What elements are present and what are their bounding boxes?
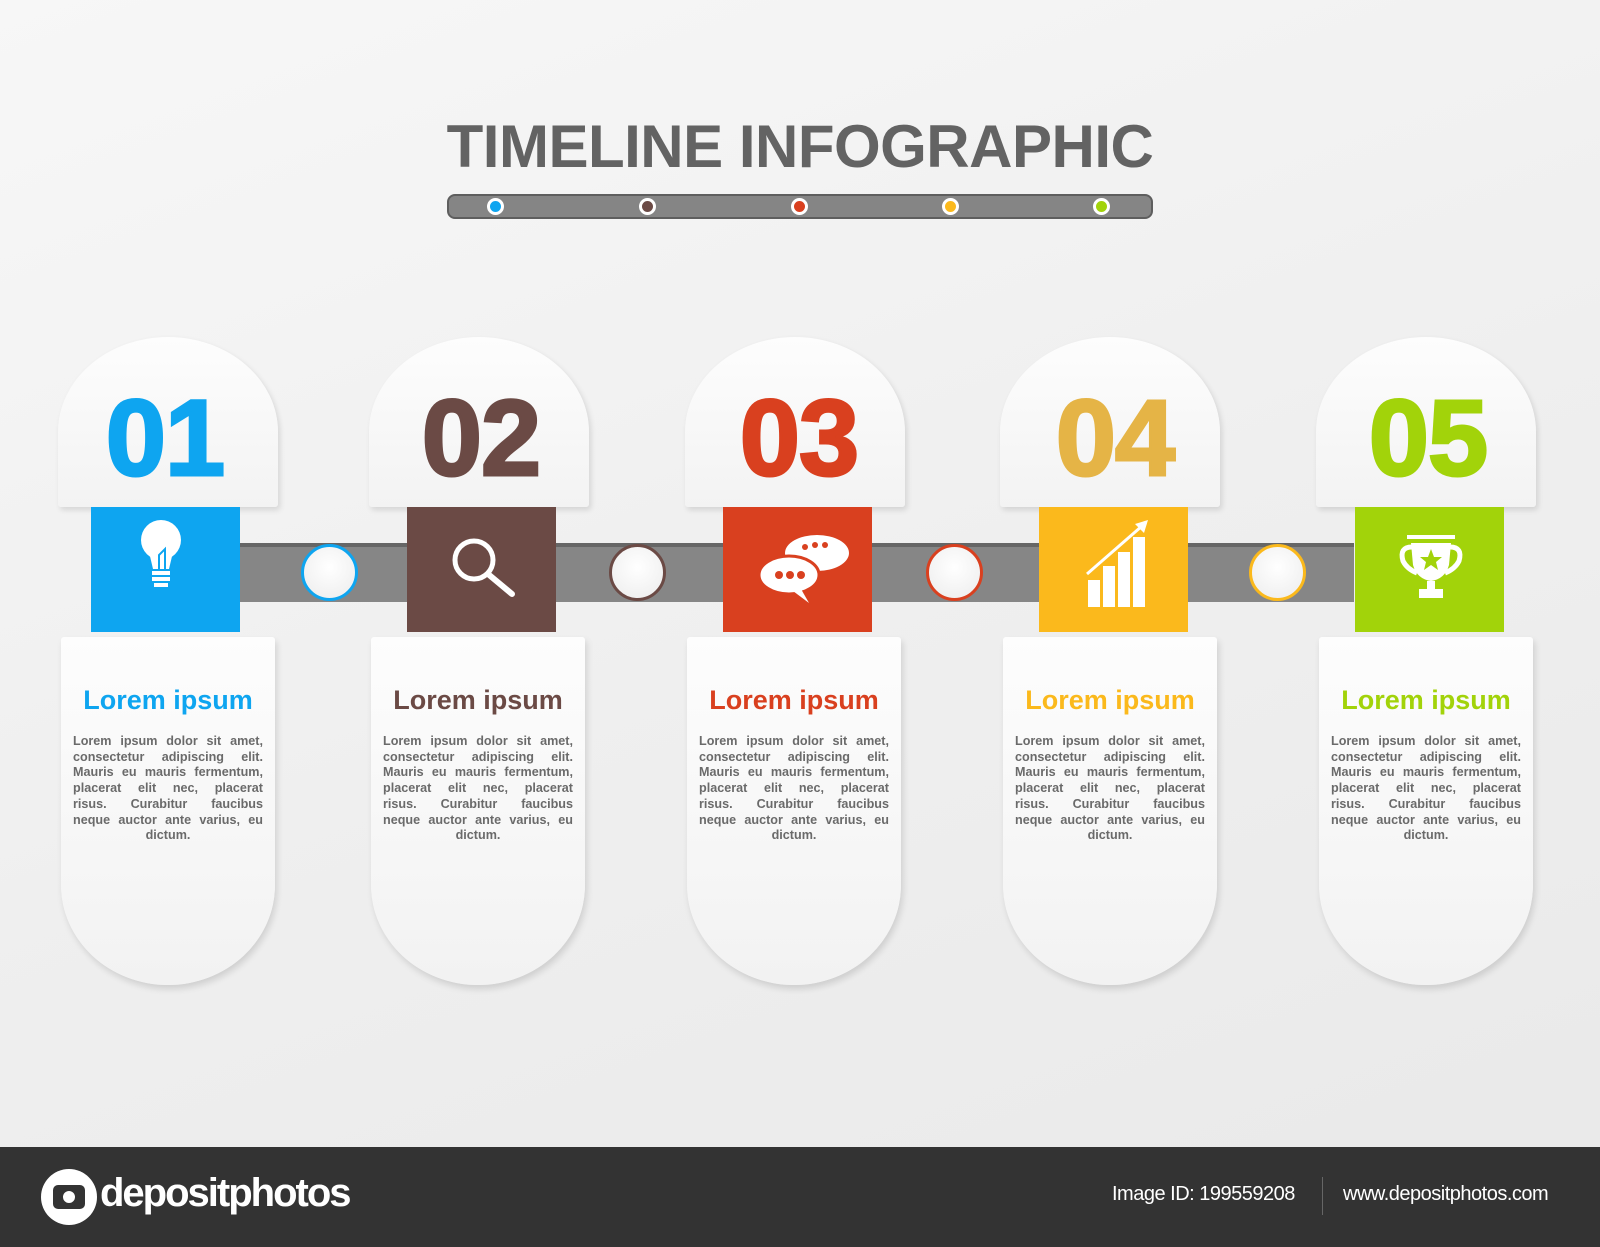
text: neque auctor ante varius, eu — [1015, 813, 1205, 827]
text: placerat elit nec, placerat — [699, 781, 889, 795]
text: placerat elit nec, placerat — [1015, 781, 1205, 795]
text: dictum. — [1404, 828, 1448, 842]
footer — [0, 1147, 1600, 1247]
logo text: depositphotos — [100, 1171, 350, 1215]
timeline bar — [240, 543, 1354, 602]
text: Lorem ipsum — [1341, 685, 1511, 715]
icon: camera logo — [41, 1169, 97, 1225]
text: consectetur adipiscing elit. — [383, 750, 573, 764]
text: Lorem ipsum dolor sit amet, — [699, 734, 889, 748]
text: 02 — [422, 377, 540, 498]
text: placerat elit nec, placerat — [383, 781, 573, 795]
text: consectetur adipiscing elit. — [1015, 750, 1205, 764]
text: 05 — [1369, 377, 1487, 498]
text: placerat elit nec, placerat — [1331, 781, 1521, 795]
text: risus. Curabitur faucibus — [1331, 797, 1521, 811]
text: consectetur adipiscing elit. — [1331, 750, 1521, 764]
text: Lorem ipsum — [1025, 685, 1195, 715]
text: Mauris eu mauris fermentum, — [699, 765, 889, 779]
text: risus. Curabitur faucibus — [73, 797, 263, 811]
text: placerat elit nec, placerat — [73, 781, 263, 795]
text: consectetur adipiscing elit. — [699, 750, 889, 764]
text: dictum. — [146, 828, 190, 842]
image id: Image ID: 199559208 — [1112, 1183, 1295, 1205]
step 2 — [370, 337, 592, 991]
text: neque auctor ante varius, eu — [1331, 813, 1521, 827]
text: consectetur adipiscing elit. — [73, 750, 263, 764]
url: www.depositphotos.com — [1343, 1183, 1548, 1205]
icon: trophy — [1355, 507, 1504, 632]
text: 04 — [1056, 377, 1174, 498]
step 5 — [1316, 337, 1540, 991]
text: Lorem ipsum dolor sit amet, — [383, 734, 573, 748]
text: risus. Curabitur faucibus — [699, 797, 889, 811]
step 4 — [1001, 337, 1224, 991]
text: Lorem ipsum dolor sit amet, — [1331, 734, 1521, 748]
title: TIMELINE INFOGRAPHIC — [447, 113, 1153, 180]
step 3 — [686, 337, 908, 991]
text: dictum. — [456, 828, 500, 842]
icon: growth chart — [1039, 507, 1188, 632]
step 1 — [59, 337, 282, 991]
text: Lorem ipsum — [709, 685, 879, 715]
text: dictum. — [772, 828, 816, 842]
icon: speech bubbles — [723, 507, 872, 632]
text: Lorem ipsum dolor sit amet, — [73, 734, 263, 748]
text: dictum. — [1088, 828, 1132, 842]
text: neque auctor ante varius, eu — [699, 813, 889, 827]
text: neque auctor ante varius, eu — [73, 813, 263, 827]
icon: light bulb — [91, 507, 240, 632]
text: 01 — [106, 377, 224, 498]
text: neque auctor ante varius, eu — [383, 813, 573, 827]
text: Mauris eu mauris fermentum, — [73, 765, 263, 779]
text: Lorem ipsum dolor sit amet, — [1015, 734, 1205, 748]
text: Mauris eu mauris fermentum, — [383, 765, 573, 779]
connector circles — [301, 520, 1306, 985]
text: Mauris eu mauris fermentum, — [1015, 765, 1205, 779]
text: risus. Curabitur faucibus — [1015, 797, 1205, 811]
title bar with dots — [447, 194, 1153, 219]
icon: magnifier — [407, 507, 556, 632]
text: Mauris eu mauris fermentum, — [1331, 765, 1521, 779]
text: Lorem ipsum — [393, 685, 563, 715]
text: 03 — [740, 377, 858, 498]
text: Lorem ipsum — [83, 685, 253, 715]
text: risus. Curabitur faucibus — [383, 797, 573, 811]
